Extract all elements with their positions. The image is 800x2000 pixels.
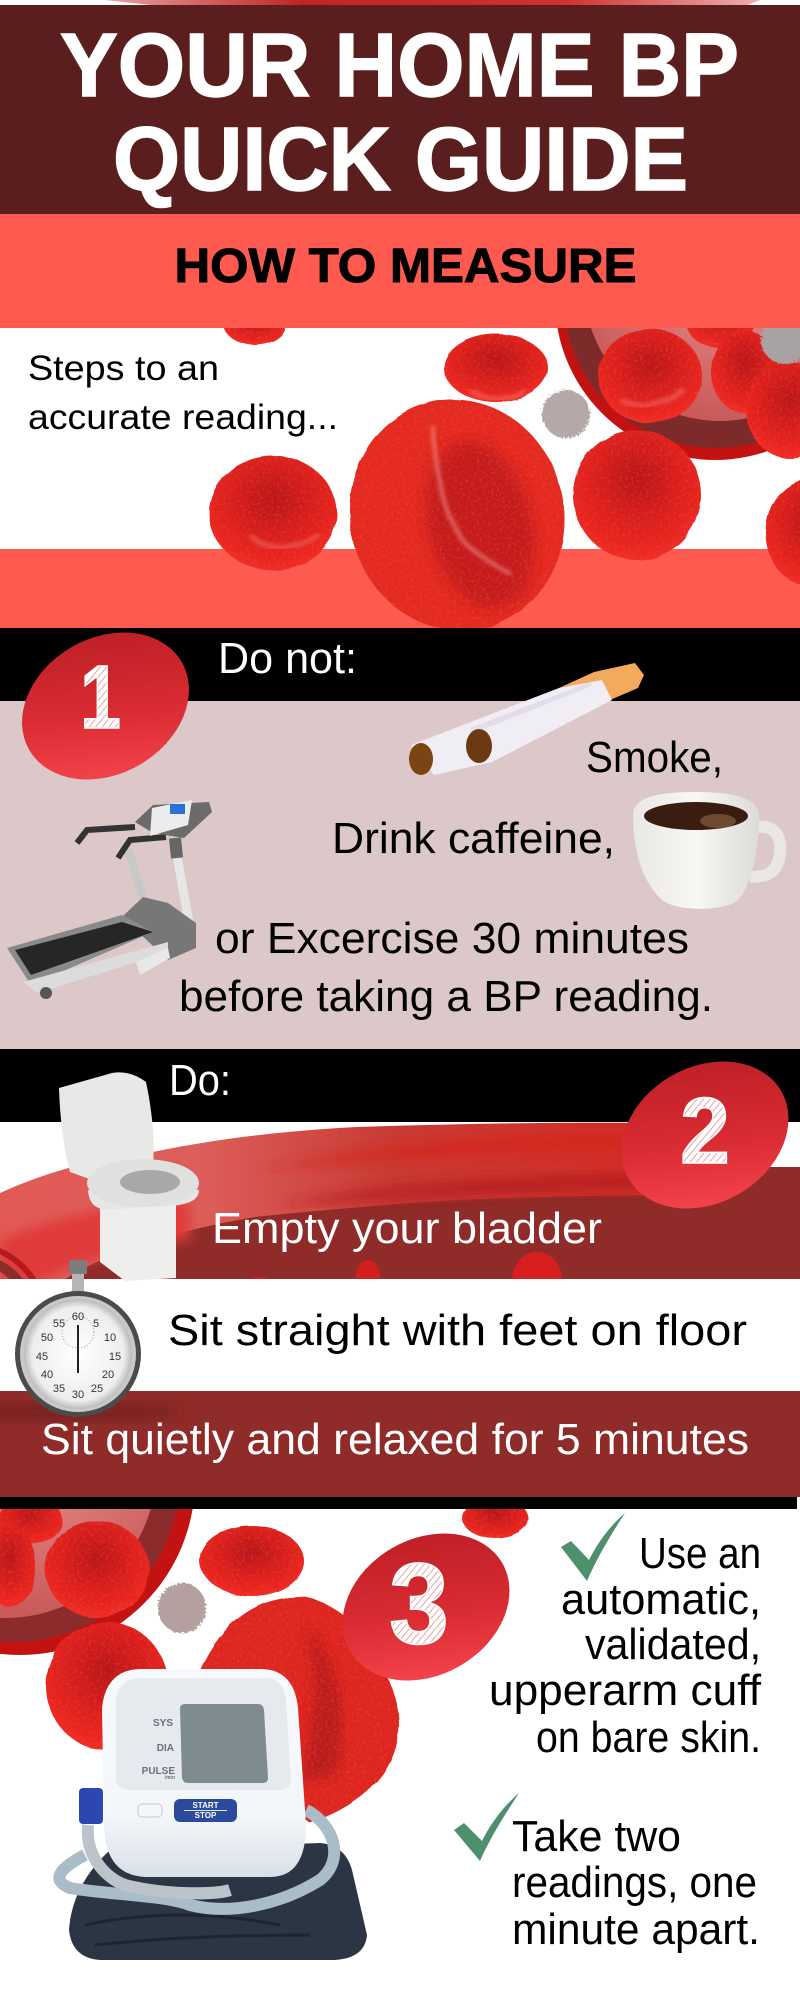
labels [142,1718,175,1781]
text: smoke: Smoke, [586,733,723,782]
start stop button: START [192,1801,219,1810]
text: cuff instructions: on bare skin. [536,1713,761,1762]
icon: check mark 2 [454,1793,519,1861]
icon: stopwatch: 35 [53,1383,65,1395]
text: cuff instructions: validated, [585,1620,761,1669]
icon: coffee cup [633,792,780,909]
text: cuff instructions [489,1529,762,1762]
band: sit quietly [0,1391,800,1497]
icon: stopwatch: 50 [41,1332,53,1344]
intro text [28,349,338,437]
icon: toilet [59,1072,199,1281]
panel: intro [0,140,800,653]
icon: stopwatch [15,1260,141,1417]
text: two readings: readings, one [512,1858,757,1907]
panel: step 1 do not [0,603,800,1049]
icon: stopwatch: 45 [36,1351,48,1363]
title banner: QUICK GUIDE [113,110,688,210]
tube and dark band illustration [0,1122,800,1279]
text: two readings: minute apart. [512,1905,760,1954]
text: cuff instructions: Use an [639,1529,761,1578]
icon: check mark 1 [561,1513,625,1581]
text: exercise [179,914,713,1021]
icon: stopwatch: 5 [93,1318,99,1330]
start stop button: STOP [195,1811,217,1820]
panel: step 3 [0,1509,762,1960]
small button [138,1804,162,1817]
blood cells and vessel illustration [209,328,800,628]
badge: number 2 [595,1032,800,1238]
heading: do not: Do not: [218,634,357,683]
start stop button [174,1799,237,1822]
top red sliver [105,0,760,6]
text: exercise: or Excercise 30 minutes [215,914,689,963]
icon: stopwatch: 25 [91,1383,103,1395]
text: two readings: Take two [512,1812,681,1861]
icon: stopwatch: 40 [41,1369,53,1381]
badge: number 3 [316,1504,536,1710]
icon: stopwatch: 30 [72,1389,84,1401]
labels: DIA [157,1743,174,1754]
tube [59,1810,334,1909]
labels: SYS [153,1718,173,1729]
cuff [69,1843,367,1960]
icon: stopwatch: 10 [104,1332,116,1344]
icon: cigarettes [409,663,644,775]
icon: treadmill [7,800,212,999]
body [102,1669,306,1877]
badge: number 3: 3 [389,1540,449,1668]
subtitle band: HOW TO MEASURE [174,240,636,293]
badge: number 1 [0,603,216,809]
connector [79,1788,103,1824]
panel: step 2 do [0,1032,800,1509]
badge: number 1: 1 [80,648,121,748]
text: drink caffeine: Drink caffeine, [332,814,615,863]
text: exercise: before taking a BP reading. [179,972,713,1021]
badge: number 2: 2 [680,1078,730,1183]
title banner [0,5,800,214]
divider bar [0,1497,797,1509]
blood cells and vessel illustration [0,1509,528,1822]
icon: stopwatch: 20 [102,1369,114,1381]
icon: blood pressure monitor [59,1669,367,1960]
icon: stopwatch: 55 [53,1318,65,1330]
icon: stopwatch: 15 [109,1351,121,1363]
band: sit quietly: Sit quietly and relaxed for 5 minutes [41,1415,749,1464]
intro text: Steps to an [28,349,219,388]
screen [180,1704,268,1783]
icon: stopwatch: 60 [72,1311,84,1323]
intro text: accurate reading... [28,398,338,437]
title banner: YOUR HOME BP [60,16,739,116]
text: two readings [512,1812,760,1954]
subtitle band [0,214,800,328]
heading: do: Do: [169,1056,231,1105]
text: cuff instructions: automatic, [561,1575,761,1624]
labels: /min [165,1775,175,1781]
band: sit straight: Sit straight with feet on floor [168,1306,747,1355]
text: empty bladder: Empty your bladder [212,1204,602,1253]
labels: PULSE [142,1766,175,1777]
text: cuff instructions: upperarm cuff [489,1666,762,1715]
